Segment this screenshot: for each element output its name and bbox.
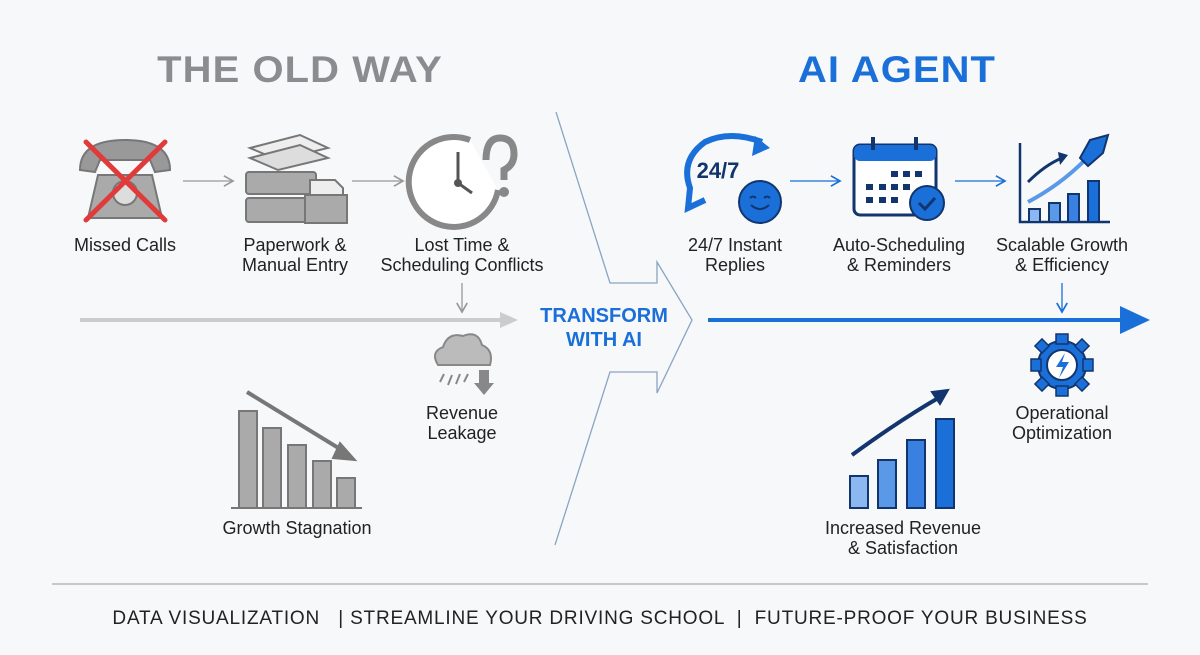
label: scalable growth: [996, 235, 1128, 275]
label: transform with ai: [540, 305, 668, 351]
arrow: [352, 180, 403, 182]
label: growth stagnation: Growth Stagnation: [222, 518, 372, 538]
footer: DATA VISUALIZATION | STREAMLINE YOUR DRIVING SCHOOL | FUTURE-PROOF YOUR BUSINESS: [112, 608, 1088, 629]
arrow: [955, 180, 1005, 182]
label: paperwork: Paperwork &: [243, 235, 347, 255]
label: 24/7 replies: Replies: [705, 255, 765, 275]
divider: [52, 583, 1148, 585]
label: operational optimization: Operational: [1015, 403, 1109, 423]
label: revenue leakage: Leakage: [427, 423, 497, 443]
arrow: down right: [1061, 283, 1063, 312]
label: increased revenue: Increased Revenue: [825, 518, 981, 538]
label: increased revenue: [825, 518, 981, 558]
label: auto-scheduling: [833, 235, 965, 275]
arrow: [790, 180, 840, 182]
label: revenue leakage: Revenue: [426, 403, 498, 423]
icon: 24/7: 24/7: [697, 158, 739, 183]
icon: 24/7: [687, 136, 781, 223]
label: paperwork: [242, 235, 348, 275]
icon: cloud rain: [435, 334, 494, 395]
icon: gear: [1031, 334, 1093, 396]
arrow: [183, 180, 233, 182]
title: ai agent: AI AGENT: [798, 49, 996, 90]
arrow: old way gray line: [80, 312, 518, 328]
icon: calendar: [854, 137, 944, 220]
title: the old way: THE OLD WAY: [157, 49, 443, 90]
label: scalable growth: Scalable Growth: [996, 235, 1128, 255]
arrow: down left: [461, 283, 463, 312]
label: transform with ai: WITH AI: [566, 329, 642, 351]
label: operational optimization: Optimization: [1012, 423, 1112, 443]
icon: paperwork: [246, 135, 347, 223]
label: increased revenue: & Satisfaction: [848, 538, 958, 558]
label: operational optimization: [1012, 403, 1112, 443]
arrow: ai blue line: [708, 306, 1150, 334]
label: auto-scheduling: & Reminders: [847, 255, 951, 275]
icon: clock with question: [409, 137, 514, 227]
icon: growth rocket: [1020, 135, 1110, 222]
label: missed calls: Missed Calls: [74, 235, 176, 255]
label: revenue leakage: [426, 403, 498, 443]
label: 24/7 replies: 24/7 Instant: [688, 235, 782, 255]
chart: rising bars: [850, 390, 954, 508]
chevron transform: [555, 112, 692, 545]
icon: phone crossed: [80, 140, 170, 220]
label: 24/7 replies: [688, 235, 782, 275]
label: lost time: Scheduling Conflicts: [380, 255, 544, 275]
label: transform with ai: TRANSFORM: [540, 305, 668, 327]
chart: decline bars: [231, 392, 362, 508]
label: scalable growth: & Efficiency: [1015, 255, 1109, 275]
label: lost time: [380, 235, 544, 275]
label: auto-scheduling: Auto-Scheduling: [833, 235, 965, 255]
label: lost time: Lost Time &: [414, 235, 510, 255]
label: paperwork: Manual Entry: [242, 255, 348, 275]
